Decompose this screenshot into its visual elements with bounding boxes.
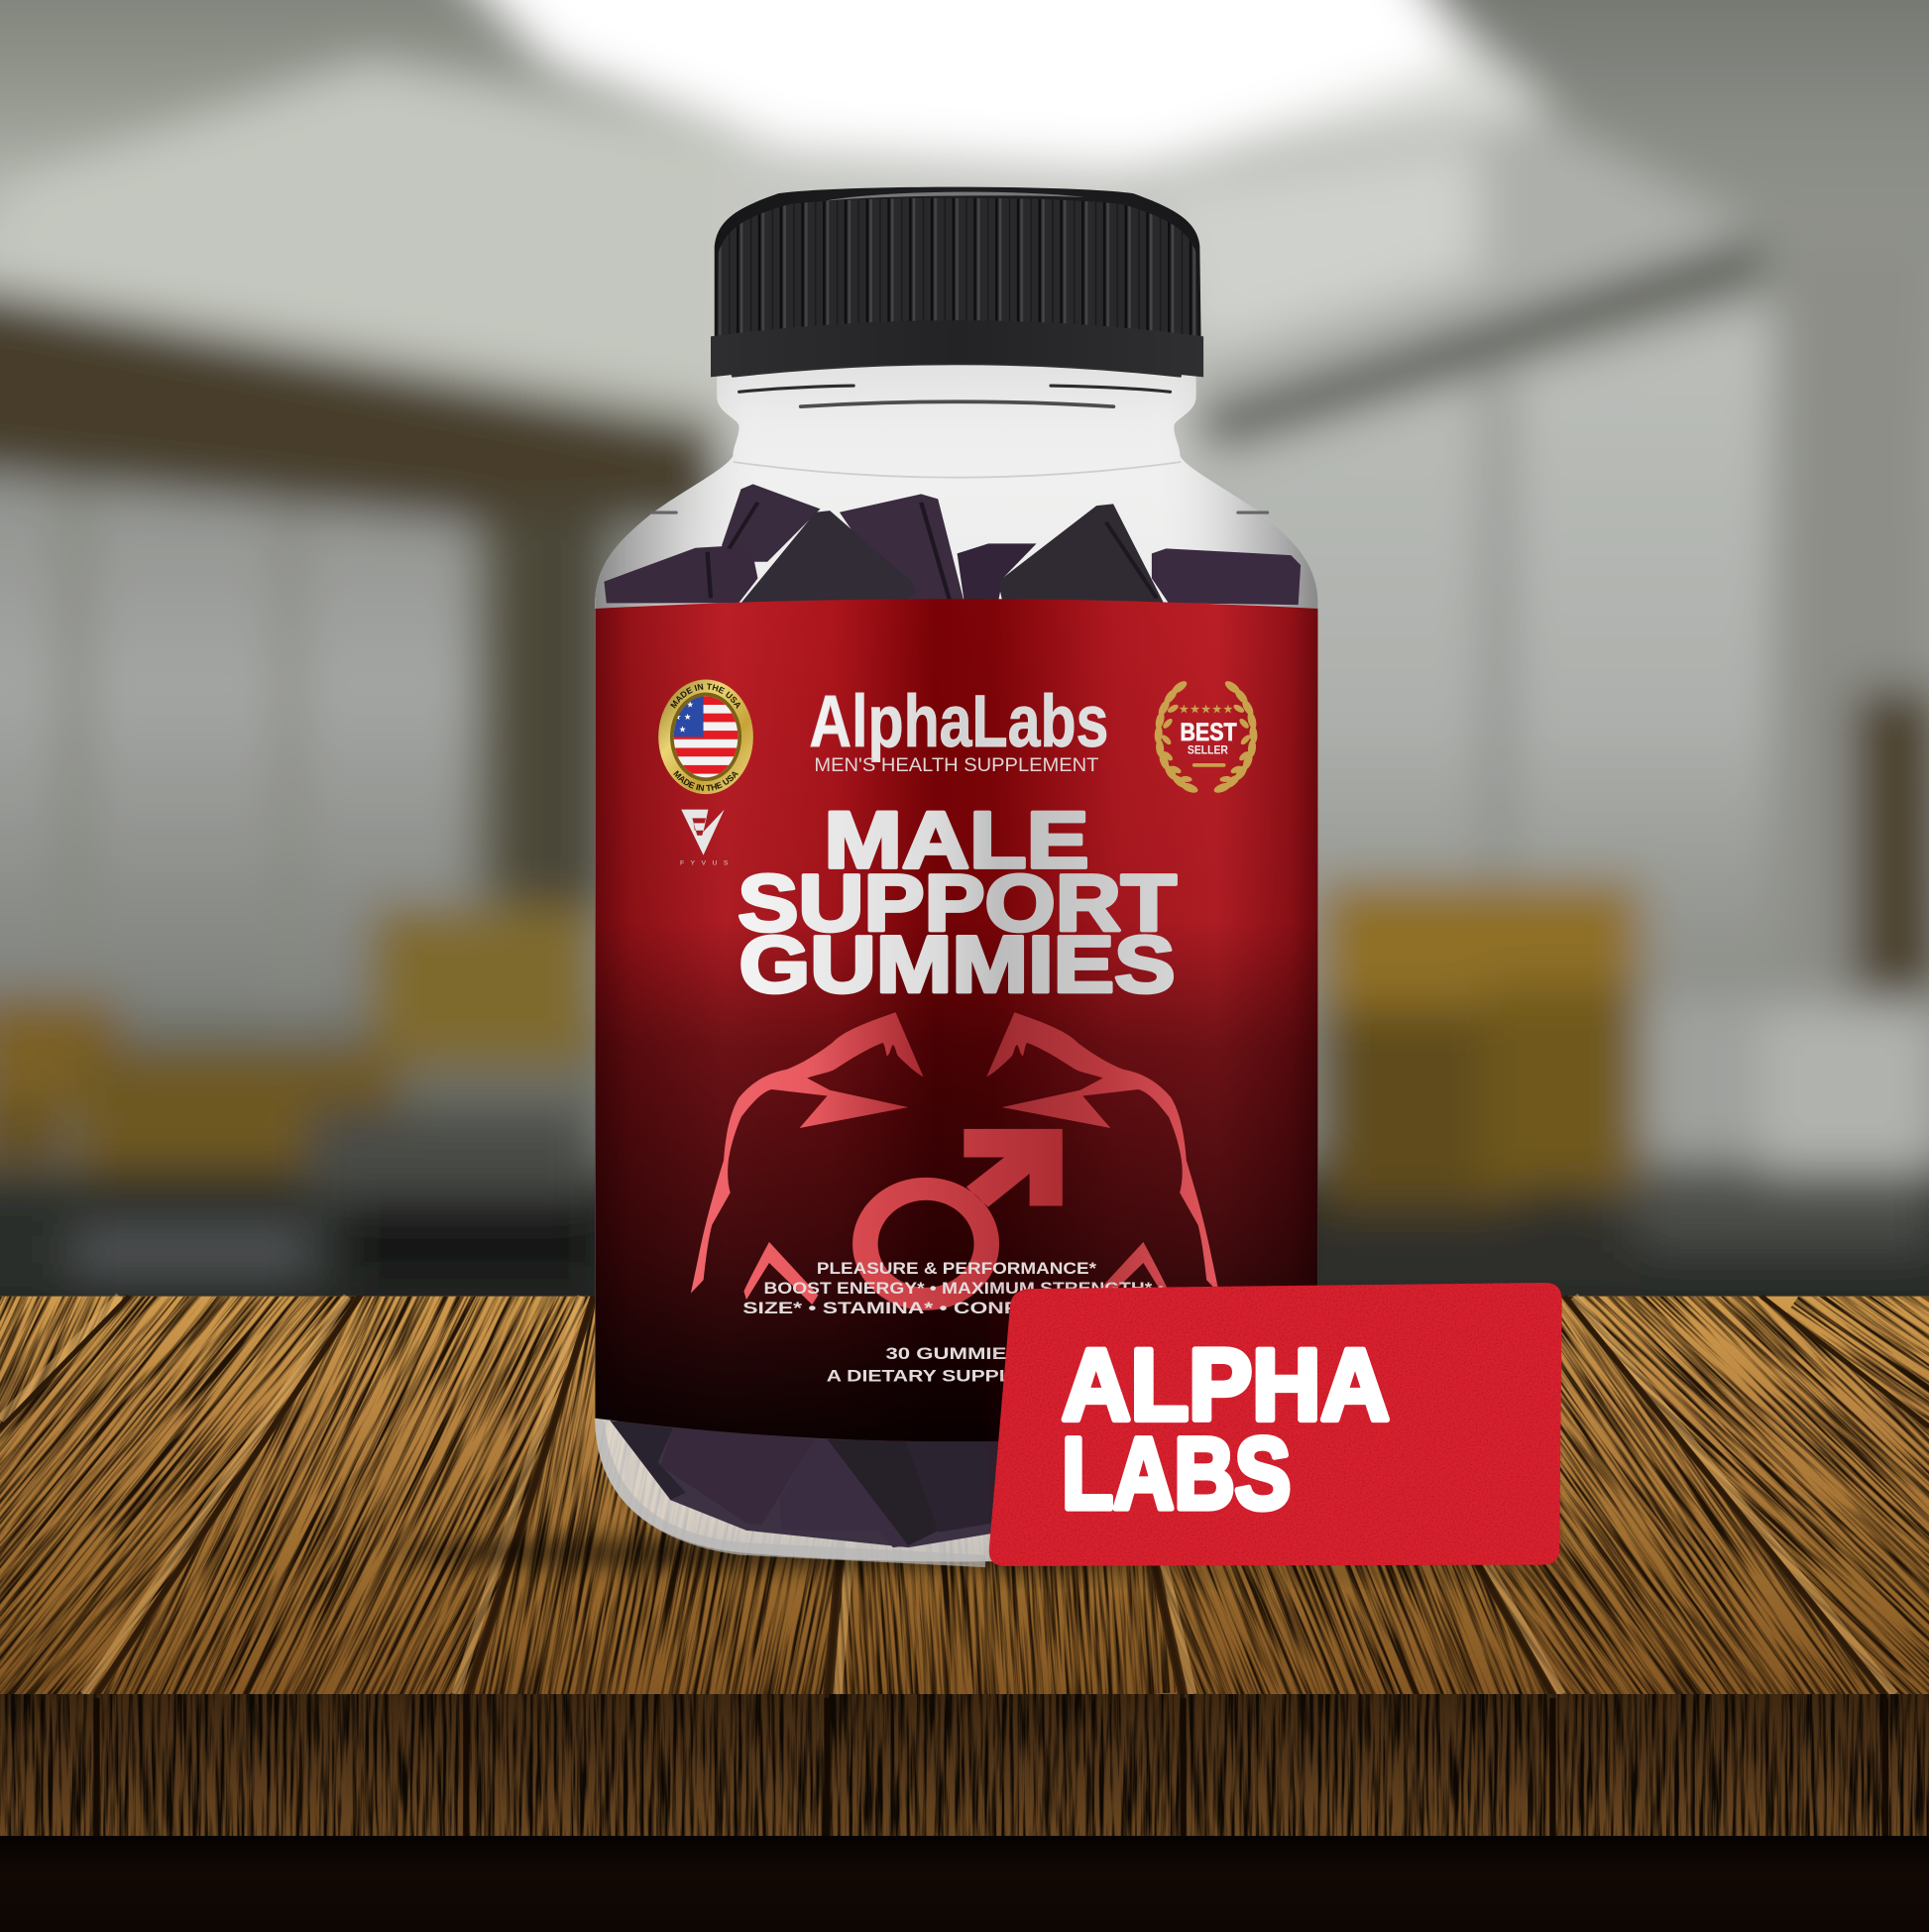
jar glass body xyxy=(595,365,1318,1567)
tagline: MEN'S HEALTH SUPPLEMENT xyxy=(814,755,1099,776)
card wordmark: ALPHA xyxy=(1062,1328,1390,1441)
table top surface xyxy=(0,1293,1929,1695)
card wordmark: LABS xyxy=(1062,1417,1291,1530)
benefits text: 30 GUMMIES xyxy=(885,1344,1021,1363)
table front edge xyxy=(0,1694,1929,1837)
blurred room background xyxy=(0,0,1929,1318)
jar xyxy=(595,186,1318,1568)
product title: MALE xyxy=(824,796,1089,885)
product title: SUPPORT xyxy=(738,858,1177,948)
cap xyxy=(711,187,1203,377)
made in USA badge: MADE IN THE USA xyxy=(670,683,740,709)
benefits text: PLEASURE & PERFORMANCE* xyxy=(817,1259,1096,1278)
made in USA badge xyxy=(658,680,753,795)
best seller laurel badge: SELLER xyxy=(1188,743,1228,757)
product title: GUMMIES xyxy=(739,921,1175,1010)
red Alpha Labs card xyxy=(989,1283,1562,1566)
benefits text: SIZE* • STAMINA* • CONFIDENCE* xyxy=(742,1299,1113,1317)
best seller laurel badge: ★★★★★ xyxy=(1179,703,1233,717)
FYVUS logo: FYVUS xyxy=(680,860,729,867)
best seller laurel badge: BEST xyxy=(1180,720,1237,746)
left sofas xyxy=(370,906,598,1066)
label xyxy=(595,599,1318,1441)
dark ceiling beam left xyxy=(0,278,721,523)
best seller laurel badge xyxy=(1154,679,1258,795)
table underside xyxy=(0,1836,1929,1932)
gummies top xyxy=(604,484,1301,605)
wooden table xyxy=(0,1293,1929,1932)
gummies bottom xyxy=(610,1419,999,1547)
card shadow xyxy=(993,1565,1559,1575)
plank seams xyxy=(0,1297,1894,1694)
made in USA badge: ★ ★ xyxy=(674,712,692,722)
benefits text xyxy=(742,1259,1164,1385)
FYVUS logo xyxy=(680,810,729,867)
muscle silhouette xyxy=(691,1012,1219,1305)
neck highlights xyxy=(651,364,1268,512)
made in USA badge: MADE IN THE USA xyxy=(673,770,738,791)
product title xyxy=(738,796,1177,1010)
left windows xyxy=(0,456,505,1035)
ceiling light xyxy=(1139,0,1554,167)
card wordmark xyxy=(1062,1328,1390,1530)
made in USA badge: ★ ★ xyxy=(676,699,694,709)
right windows xyxy=(1213,302,1773,985)
right sofa xyxy=(1320,881,1641,1010)
male symbol xyxy=(852,1129,1063,1310)
shadow of jar on table xyxy=(395,1535,1183,1570)
brand name: AlphaLabs xyxy=(809,680,1108,762)
benefits text: A DIETARY SUPPLEMENT xyxy=(827,1366,1086,1385)
label background xyxy=(595,579,1318,1479)
made in USA badge: ★ xyxy=(679,724,687,734)
benefits text: BOOST ENERGY* • MAXIMUM STRENGTH* • xyxy=(763,1279,1164,1298)
dark beam right xyxy=(1194,237,1761,451)
floor xyxy=(0,1165,1929,1318)
